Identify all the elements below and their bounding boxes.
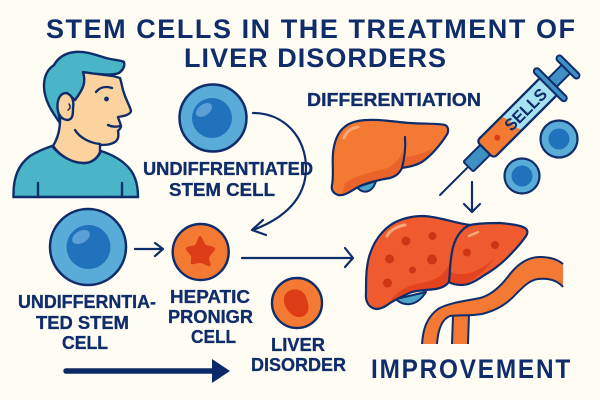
icon: small cell left [504, 158, 540, 194]
label: undifferentiated stem cell, lower: UNDIFFERNTIA- [18, 292, 156, 312]
shirt [13, 146, 138, 197]
label: undifferentiated stem cell: UNDIFFRENTIATED [143, 159, 313, 179]
icon: improved liver [366, 216, 527, 309]
needle [440, 165, 470, 195]
label: liver disorder [251, 335, 346, 375]
label: hepatic cell: HEPATIC [170, 287, 250, 307]
ear [57, 93, 73, 120]
eye [104, 97, 109, 101]
red dot [493, 133, 502, 142]
icon: hepatic progenitor cell [173, 224, 229, 280]
label: undifferentiated stem cell [143, 159, 313, 200]
label: undifferentiated stem cell: STEM CELL [169, 180, 275, 200]
label: liver disorder: LIVER [271, 335, 325, 355]
label: hepatic cell [168, 287, 253, 347]
head and neck [53, 72, 131, 163]
hair [44, 52, 124, 123]
title: LIVER DISORDERS [184, 43, 446, 73]
mouth [108, 125, 120, 127]
flange [533, 67, 568, 102]
arrow: hepatic cell to liver [242, 248, 353, 267]
icon: healthy liver [332, 120, 448, 195]
label: undifferentiated stem cell, lower: CELL [62, 333, 108, 353]
label: undifferentiated stem cell, lower [18, 292, 156, 353]
plunger top [555, 54, 581, 80]
label: hepatic cell: PRONIGR [168, 307, 253, 327]
label: differentiation: DIFFERENTIATION [307, 89, 481, 110]
icon: bile duct tube [422, 257, 563, 344]
rod [545, 63, 572, 90]
title [46, 14, 575, 73]
hub [463, 144, 491, 172]
arrow: large bottom [66, 359, 230, 383]
label: liver disorder: DISORDER [251, 355, 346, 375]
icon: top stem cell [180, 84, 246, 152]
jaw line [75, 130, 100, 144]
label: undifferentiated stem cell, lower: TED STEM [36, 313, 129, 333]
orange fill [478, 114, 521, 157]
barrel [477, 76, 559, 158]
icon: small cell right [540, 120, 578, 158]
label: improvement: IMPROVEMENT [371, 354, 572, 384]
arrow: curved to hepatic cell [252, 113, 306, 235]
icon: syringe [424, 49, 586, 211]
icon: large stem cell [50, 209, 126, 285]
arrow: down to liver [464, 182, 480, 212]
icon: liver disorder cell [272, 278, 322, 328]
title: STEM CELLS IN THE TREATMENT OF [46, 14, 575, 44]
eyebrow [96, 87, 112, 92]
icon: person [13, 52, 138, 197]
syringe label: SELLS [501, 85, 551, 135]
arrow: stem cell to hepatic cell [135, 243, 163, 256]
label: hepatic cell: CELL [191, 327, 236, 347]
